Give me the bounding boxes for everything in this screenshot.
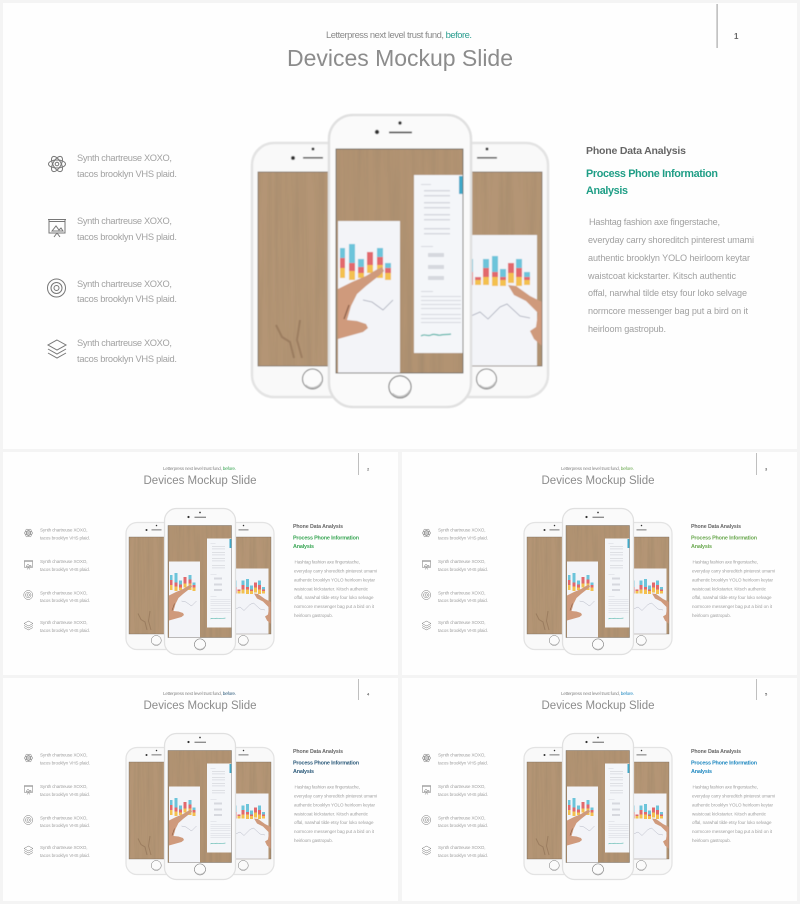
- icon: atom: [422, 528, 431, 538]
- page number: [358, 453, 370, 475]
- feature text: tacos brooklyn VHS plaid.: [438, 598, 488, 603]
- page number: 4: [367, 692, 370, 696]
- feature text: tacos brooklyn VHS plaid.: [40, 567, 90, 572]
- body text: offal, narwhal tilde etsy four loko selvage: [692, 595, 772, 600]
- page number: 1: [734, 32, 739, 41]
- icon: target: [48, 279, 66, 297]
- body text: waistcoat kickstarter. Kitsch authentic: [294, 586, 369, 592]
- body text: everyday carry shoreditch pinterest umami: [692, 568, 775, 574]
- feature text: tacos brooklyn VHS plaid.: [40, 823, 90, 828]
- page number: [358, 679, 370, 700]
- feature text: Synth chartreuse XOXO,: [438, 620, 486, 625]
- heading: Phone Data Analysis: [586, 145, 686, 157]
- icon: target: [422, 816, 431, 824]
- body text: waistcoat kickstarter. Kitsch authentic: [587, 271, 736, 281]
- feature text: tacos brooklyn VHS plaid.: [438, 536, 488, 540]
- slide background: [402, 452, 797, 675]
- body text: everyday carry shoreditch pinterest umami: [588, 235, 754, 245]
- feature text: Synth chartreuse XOXO,: [77, 338, 172, 348]
- page number: 5: [765, 692, 768, 696]
- icon: atom: [422, 753, 431, 763]
- body text: everyday carry shoreditch pinterest umami: [692, 794, 775, 798]
- body text: waistcoat kickstarter. Kitsch authentic: [692, 812, 767, 816]
- subheading: Analysis: [293, 769, 314, 775]
- feature text: Synth chartreuse XOXO,: [438, 559, 486, 564]
- icon: layers: [48, 340, 66, 358]
- feature text: tacos brooklyn VHS plaid.: [40, 598, 90, 603]
- feature list: [48, 153, 177, 364]
- feature text: Synth chartreuse XOXO,: [40, 590, 88, 596]
- feature text: Synth chartreuse XOXO,: [77, 153, 172, 163]
- icon: atom: [24, 753, 33, 763]
- feature text: Synth chartreuse XOXO,: [40, 816, 88, 820]
- icon: layers: [24, 621, 33, 630]
- feature list: [24, 528, 90, 633]
- subheading: Analysis: [691, 769, 712, 775]
- subtitle: Letterpress next level trust fund, before.: [561, 466, 634, 471]
- subheading: Analysis: [691, 544, 712, 550]
- body text: waistcoat kickstarter. Kitsch authentic: [692, 586, 767, 592]
- body text: normcore messenger bag put a bird on it: [692, 604, 773, 609]
- subheading: Process Phone Information: [293, 536, 359, 542]
- feature text: Synth chartreuse XOXO,: [40, 559, 88, 564]
- feature text: Synth chartreuse XOXO,: [438, 590, 486, 596]
- feature list: [24, 752, 90, 858]
- body text: normcore messenger bag put a bird on it: [692, 829, 773, 834]
- icon: layers: [24, 846, 33, 855]
- feature text: tacos brooklyn VHS plaid.: [77, 232, 177, 242]
- feature text: tacos brooklyn VHS plaid.: [438, 628, 488, 633]
- title: Devices Mockup Slide: [542, 475, 654, 487]
- icon: presentation easel: [48, 220, 66, 237]
- page number: [716, 4, 739, 48]
- phones mockup: [252, 115, 548, 407]
- icon: target: [422, 590, 431, 600]
- title: Devices Mockup Slide: [144, 475, 256, 487]
- subtitle: Letterpress next level trust fund, before.: [326, 29, 472, 40]
- feature text: Synth chartreuse XOXO,: [40, 752, 88, 758]
- page number: [756, 453, 768, 475]
- feature text: tacos brooklyn VHS plaid.: [40, 536, 90, 540]
- subtitle: Letterpress next level trust fund, before.: [163, 466, 236, 471]
- feature text: tacos brooklyn VHS plaid.: [438, 823, 488, 828]
- icon: presentation easel: [24, 786, 33, 794]
- body text: Hashtag fashion axe fingerstache,: [589, 217, 720, 227]
- small slide: blue: [402, 678, 797, 901]
- heading: Phone Data Analysis: [293, 524, 343, 530]
- feature text: Synth chartreuse XOXO,: [40, 845, 88, 850]
- body text: heirloom gastropub.: [294, 613, 333, 618]
- page number: 3: [765, 466, 768, 472]
- body text: normcore messenger bag put a bird on it: [294, 829, 375, 834]
- feature text: Synth chartreuse XOXO,: [438, 845, 486, 850]
- body text: heirloom gastropub.: [692, 838, 731, 843]
- phones mockup: [126, 508, 274, 654]
- icon: layers: [422, 621, 431, 630]
- feature text: Synth chartreuse XOXO,: [40, 528, 88, 532]
- feature text: Synth chartreuse XOXO,: [438, 752, 486, 758]
- body text: offal, narwhal tilde etsy four loko selvage: [294, 595, 374, 600]
- feature text: Synth chartreuse XOXO,: [77, 279, 172, 289]
- feature text: tacos brooklyn VHS plaid.: [77, 294, 177, 304]
- body text: waistcoat kickstarter. Kitsch authentic: [294, 812, 369, 816]
- feature text: Synth chartreuse XOXO,: [438, 784, 486, 789]
- heading: Phone Data Analysis: [691, 524, 741, 530]
- body text: everyday carry shoreditch pinterest umami: [294, 794, 377, 798]
- subtitle: Letterpress next level trust fund, before.: [561, 691, 634, 696]
- small slide: olive: [402, 452, 797, 675]
- subheading: Analysis: [293, 544, 314, 550]
- body text: heirloom gastropub.: [588, 324, 666, 334]
- body text: Hashtag fashion axe fingerstache,: [294, 560, 360, 564]
- icon: presentation easel: [24, 561, 33, 570]
- body text: normcore messenger bag put a bird on it: [294, 604, 375, 609]
- feature text: tacos brooklyn VHS plaid.: [438, 853, 488, 858]
- heading: Phone Data Analysis: [293, 749, 343, 755]
- feature text: Synth chartreuse XOXO,: [438, 528, 486, 532]
- icon: atom: [48, 155, 66, 173]
- body text: offal, narwhal tilde etsy four loko selvage: [294, 820, 374, 825]
- body text: offal, narwhal tilde etsy four loko selvage: [588, 288, 747, 298]
- feature text: Synth chartreuse XOXO,: [438, 816, 486, 820]
- slide background: [3, 3, 797, 449]
- feature text: tacos brooklyn VHS plaid.: [438, 567, 488, 572]
- feature text: Synth chartreuse XOXO,: [40, 620, 88, 625]
- icon: target: [24, 816, 33, 824]
- subheading: Analysis: [586, 185, 628, 197]
- body text: heirloom gastropub.: [692, 613, 731, 618]
- icon: atom: [24, 528, 33, 538]
- feature text: tacos brooklyn VHS plaid.: [77, 354, 177, 364]
- body text: Hashtag fashion axe fingerstache,: [692, 784, 758, 790]
- icon: target: [24, 590, 33, 600]
- phones mockup: [524, 508, 672, 654]
- feature text: tacos brooklyn VHS plaid.: [438, 792, 488, 797]
- feature text: tacos brooklyn VHS plaid.: [77, 169, 177, 179]
- feature text: tacos brooklyn VHS plaid.: [40, 760, 90, 766]
- body text: authentic brooklyn YOLO heirloom keytar: [692, 802, 773, 808]
- title: Devices Mockup Slide: [542, 700, 654, 712]
- subheading: Process Phone Information: [293, 760, 359, 766]
- feature text: tacos brooklyn VHS plaid.: [438, 760, 488, 766]
- page number: 2: [367, 466, 370, 472]
- subheading: Process Phone Information: [691, 536, 757, 542]
- icon: presentation easel: [422, 786, 431, 794]
- body text: everyday carry shoreditch pinterest umami: [294, 568, 377, 574]
- slide background: [3, 678, 398, 901]
- heading: Phone Data Analysis: [691, 749, 741, 755]
- feature text: Synth chartreuse XOXO,: [77, 216, 172, 226]
- feature text: tacos brooklyn VHS plaid.: [40, 628, 90, 633]
- title: Devices Mockup Slide: [144, 700, 256, 712]
- body text: authentic brooklyn YOLO heirloom keytar: [588, 253, 750, 263]
- slide background: [402, 678, 797, 901]
- icon: layers: [422, 846, 431, 855]
- body text: offal, narwhal tilde etsy four loko selvage: [692, 820, 772, 825]
- phones mockup: [524, 734, 672, 880]
- feature text: tacos brooklyn VHS plaid.: [40, 792, 90, 797]
- body text: Hashtag fashion axe fingerstache,: [294, 784, 360, 790]
- body text: Hashtag fashion axe fingerstache,: [692, 560, 758, 564]
- feature text: tacos brooklyn VHS plaid.: [40, 853, 90, 858]
- phones mockup: [126, 734, 274, 880]
- body text: authentic brooklyn YOLO heirloom keytar: [294, 802, 375, 808]
- body text: normcore messenger bag put a bird on it: [588, 306, 748, 316]
- body text: authentic brooklyn YOLO heirloom keytar: [692, 578, 773, 582]
- feature list: [422, 528, 488, 633]
- subheading: Process Phone Information: [691, 760, 757, 766]
- feature text: Synth chartreuse XOXO,: [40, 784, 88, 789]
- title: Devices Mockup Slide: [287, 45, 513, 71]
- small slide: green: [3, 452, 398, 675]
- icon: presentation easel: [422, 561, 431, 570]
- subtitle: Letterpress next level trust fund, before.: [163, 691, 236, 696]
- subheading: Process Phone Information: [586, 168, 718, 180]
- small slide: navy: [3, 678, 398, 901]
- body text: authentic brooklyn YOLO heirloom keytar: [294, 578, 375, 582]
- body text: heirloom gastropub.: [294, 838, 333, 843]
- slide background: [3, 452, 398, 675]
- main slide: [3, 3, 797, 449]
- feature list: [422, 752, 488, 858]
- page number: [756, 679, 768, 700]
